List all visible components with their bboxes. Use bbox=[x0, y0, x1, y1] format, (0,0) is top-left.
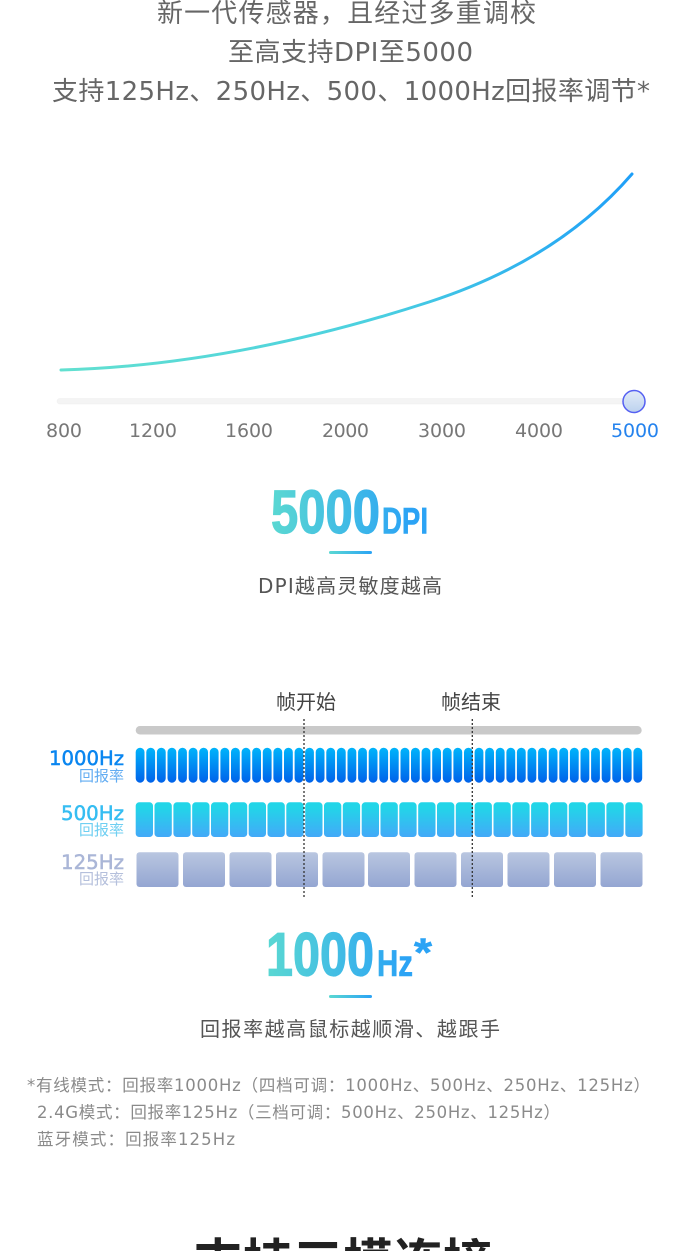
axis labels bbox=[46, 420, 659, 442]
axis labels: 4000 bbox=[515, 420, 563, 442]
DPI caption: DPI越高灵敏度越高 bbox=[258, 574, 442, 598]
polling rate diagram bbox=[49, 690, 643, 897]
500Hz bars bbox=[136, 802, 643, 837]
intro line 2: 至高支持DPI至5000 bbox=[228, 38, 473, 68]
frame end dotted line bbox=[471, 719, 473, 897]
frame end label: 帧结束 bbox=[441, 690, 501, 714]
5000 DPI value: DPI bbox=[382, 500, 428, 542]
1000Hz value: * bbox=[414, 931, 432, 975]
polling rate metric bbox=[200, 920, 500, 1041]
frame bar bbox=[136, 726, 642, 734]
footnotes bbox=[27, 1076, 650, 1149]
1000Hz row label: 回报率 bbox=[79, 767, 124, 785]
5000 DPI value: 5000 bbox=[271, 478, 380, 546]
500Hz row label: 回报率 bbox=[79, 821, 124, 839]
125Hz row label bbox=[61, 851, 124, 888]
slider knob bbox=[623, 390, 645, 412]
1000Hz value: 1000 bbox=[266, 920, 374, 988]
DPI metric bbox=[258, 478, 442, 598]
curve line bbox=[61, 174, 632, 370]
DPI curve chart bbox=[46, 174, 659, 442]
125Hz row label: 125Hz bbox=[61, 851, 124, 874]
500Hz row label bbox=[61, 802, 124, 839]
intro text bbox=[52, 0, 650, 107]
125Hz row label: 回报率 bbox=[79, 870, 124, 888]
1000Hz row label: 1000Hz bbox=[49, 747, 124, 770]
500Hz row label: 500Hz bbox=[61, 802, 124, 825]
polling caption: 回报率越高鼠标越顺滑、越跟手 bbox=[200, 1017, 500, 1041]
1000Hz value: Hz bbox=[377, 943, 413, 984]
frame start label: 帧开始 bbox=[276, 690, 336, 714]
axis labels: 1200 bbox=[129, 420, 177, 442]
bluetooth mode note: 蓝牙模式：回报率125Hz bbox=[37, 1130, 235, 1149]
axis labels: 2000 bbox=[322, 420, 369, 442]
frame start dotted line bbox=[303, 719, 305, 897]
wired mode note: *有线模式：回报率1000Hz（四档可调：1000Hz、500Hz、250Hz、125Hz） bbox=[27, 1076, 650, 1095]
slider track bbox=[57, 398, 629, 404]
axis labels: 1600 bbox=[225, 420, 273, 442]
DPI underline bbox=[329, 551, 372, 554]
axis labels: 5000 bbox=[611, 420, 659, 442]
2.4G mode note: 2.4G模式：回报率125Hz（三档可调：500Hz、250Hz、125Hz） bbox=[37, 1103, 560, 1122]
1000Hz row label bbox=[49, 747, 124, 785]
axis labels: 800 bbox=[46, 420, 82, 442]
axis labels: 3000 bbox=[418, 420, 466, 442]
125Hz bars bbox=[136, 852, 642, 887]
intro line 3: 支持125Hz、250Hz、500、1000Hz回报率调节* bbox=[52, 77, 650, 107]
1000Hz bars bbox=[136, 748, 642, 783]
polling underline bbox=[329, 995, 372, 998]
